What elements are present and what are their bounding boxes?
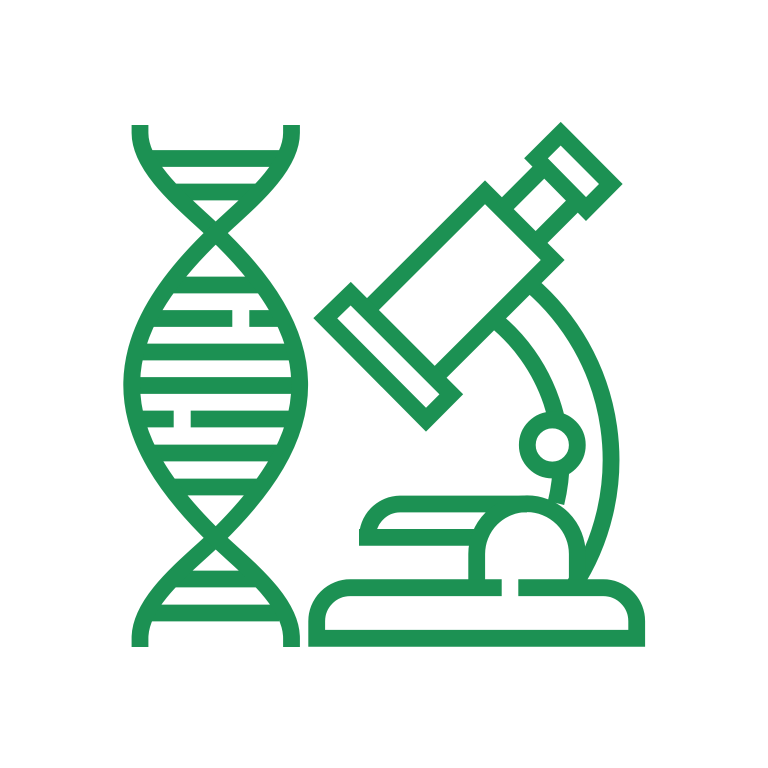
icon: microscope <box>317 134 637 638</box>
microscope objective plate <box>325 294 451 420</box>
DNA rungs <box>132 158 299 613</box>
DNA strand two <box>132 125 292 647</box>
microscope inner arm <box>493 318 561 503</box>
microscope base <box>317 588 637 638</box>
microscope eyepiece cap <box>536 134 611 209</box>
microscope focus knob <box>527 420 577 470</box>
microscope pillar arch <box>477 504 577 587</box>
microscope body tube <box>367 192 553 378</box>
DNA strand one <box>140 125 300 647</box>
microscope stage <box>359 504 527 546</box>
icon: DNA double helix <box>132 125 300 647</box>
microscope outer arm <box>530 284 611 587</box>
microscope eyepiece tube <box>502 167 578 243</box>
